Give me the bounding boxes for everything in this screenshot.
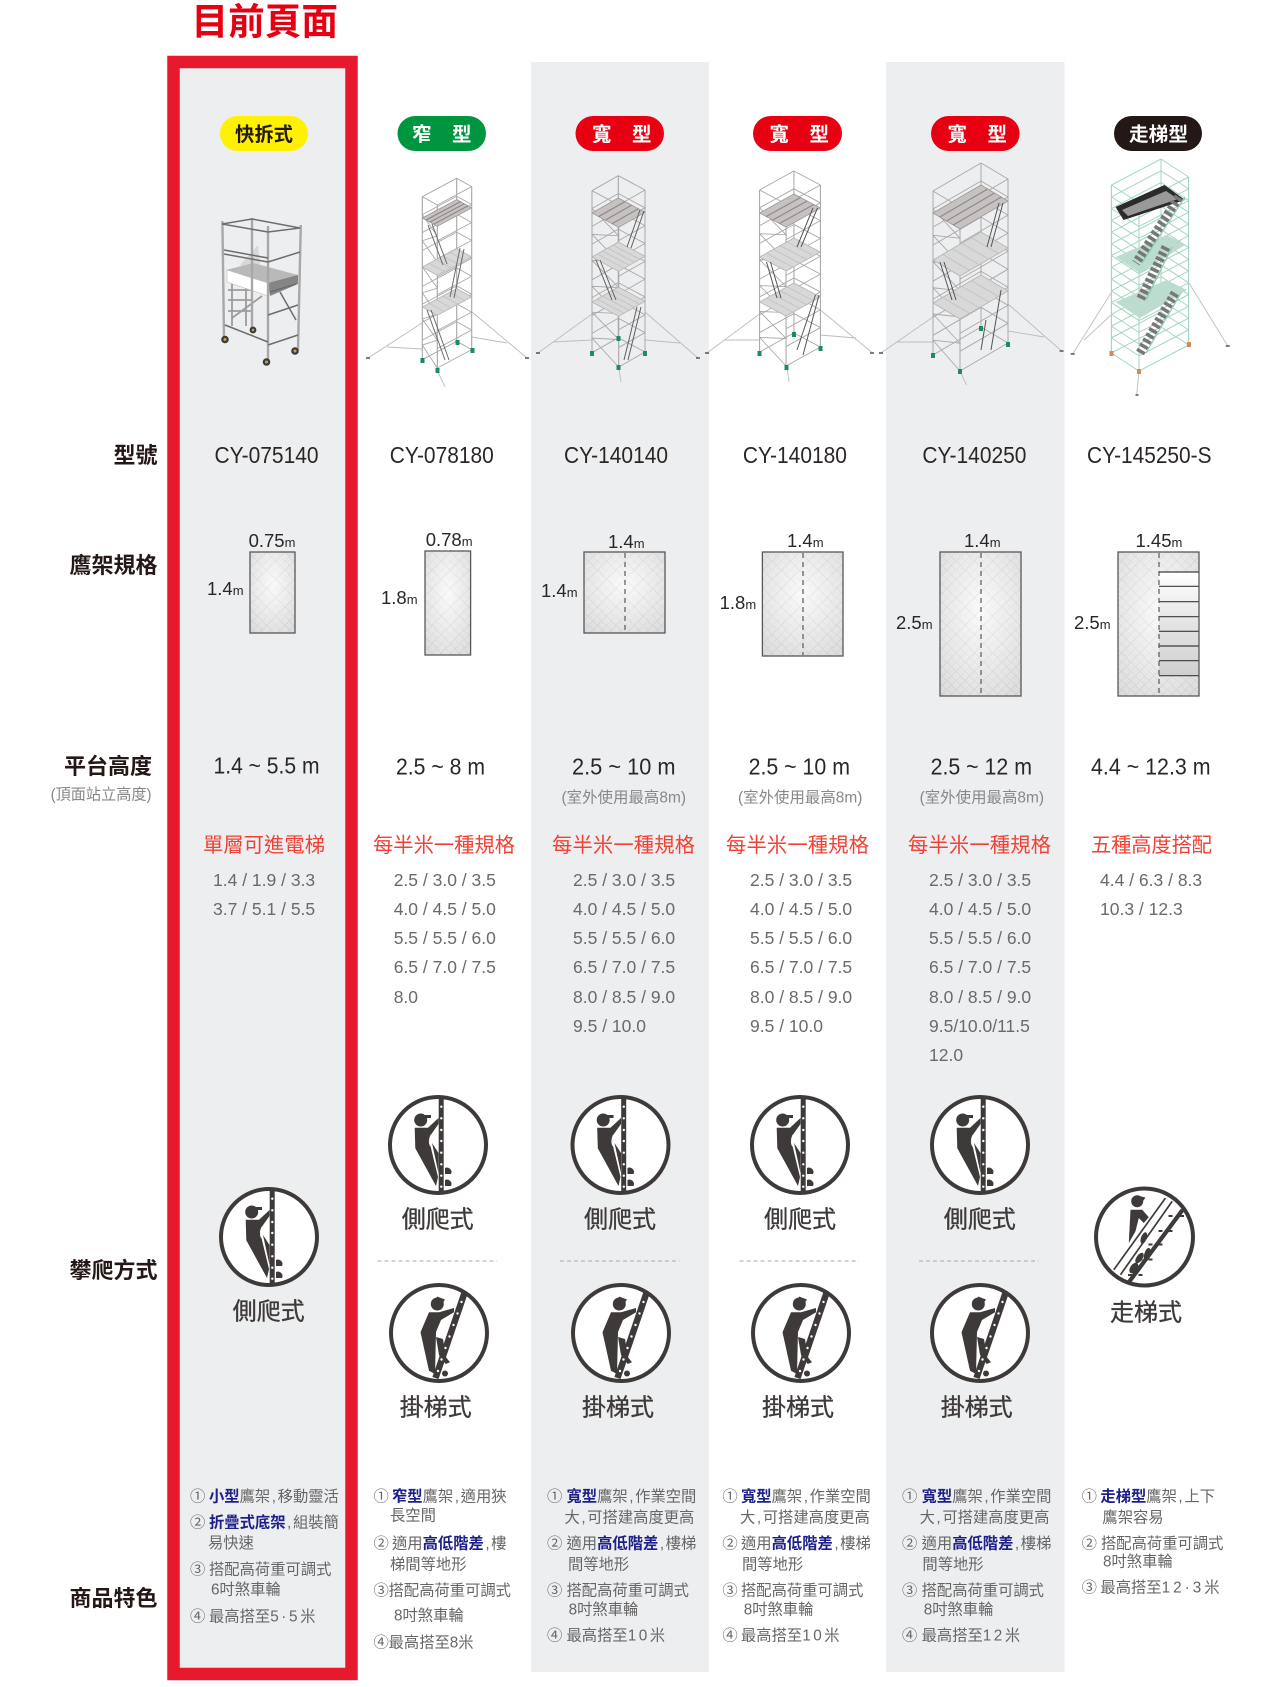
features list: ② — [722, 1535, 738, 1552]
height options list: 5.5 / 5.5 / 6.0 — [929, 928, 1031, 948]
panel: column CY-140180 — [705, 116, 874, 1644]
climb label: 掛梯式 — [941, 1395, 1013, 1422]
features list: 間等地形 — [568, 1555, 629, 1573]
climb label: 側爬式 — [764, 1207, 836, 1234]
title: current page marker: 目前頁面 — [192, 2, 338, 42]
panel: row labels — [51, 443, 158, 1611]
height options list: 4.4 / 6.3 / 8.3 — [1100, 870, 1202, 890]
label: product features: 商品特色 — [69, 1586, 158, 1611]
features list: 易快速 — [208, 1535, 254, 1552]
features list: ③ — [190, 1561, 205, 1578]
height options list: 5.5 / 5.5 / 6.0 — [394, 928, 496, 948]
platform height: 2.5 ~ 12 m — [931, 754, 1032, 780]
platform plan diagram: 2.5m — [896, 612, 933, 633]
height options list: 6.5 / 7.0 / 7.5 — [750, 957, 852, 977]
badge: wide type: 寬型 — [948, 123, 1007, 146]
features list: ① — [547, 1488, 562, 1505]
illustration: wide scaffold tower — [705, 171, 874, 382]
climb label: 掛梯式 — [400, 1395, 472, 1422]
illustration: narrow scaffold tower — [366, 178, 529, 387]
platform plan diagram: 1.4m — [207, 578, 244, 599]
features list: 寬型鷹架,作業空間 — [741, 1487, 871, 1505]
features list: ② — [547, 1535, 562, 1552]
illustration: wide tall scaffold tower — [879, 163, 1064, 385]
illustration: folding scaffold — [221, 218, 301, 366]
features list: 大,可搭建高度更高 — [564, 1509, 694, 1526]
features list: 適用高低階差,樓梯 — [566, 1534, 696, 1552]
features list: 寬型鷹架,作業空間 — [922, 1487, 1051, 1505]
height options list: 6.5 / 7.0 / 7.5 — [394, 957, 496, 977]
badge: stair type — [1114, 116, 1202, 151]
badge: wide type: 寬型 — [770, 123, 829, 146]
features list — [374, 1487, 511, 1651]
platform plan diagram: 0.75m — [249, 530, 295, 551]
features list: ③ — [374, 1582, 389, 1599]
platform plan diagram with stair — [1074, 530, 1199, 696]
height options heading: 五種高度搭配 — [1091, 834, 1212, 857]
features list: 8吋煞車輪 — [394, 1607, 464, 1624]
outdoor height note: (室外使用最高8m) — [738, 788, 862, 806]
label: platform spec: 鷹架規格 — [69, 553, 158, 578]
climb label: 掛梯式 — [762, 1395, 834, 1422]
badge: wide type: 寬型 — [592, 123, 652, 146]
height options list: 2.5 / 3.0 / 3.5 — [573, 870, 675, 890]
panel: column CY-075140 (current page) — [174, 62, 352, 1674]
platform plan diagram — [381, 529, 473, 655]
features list: ③ — [722, 1582, 738, 1599]
features list: ① — [1082, 1488, 1097, 1505]
platform height: 1.4 ~ 5.5 m — [214, 752, 320, 778]
features list: 搭配高荷重可調式 — [1101, 1535, 1223, 1552]
icon: ladder climb — [573, 1285, 669, 1381]
platform height: 2.5 ~ 10 m — [572, 754, 676, 780]
height options list: 9.5 / 10.0 — [750, 1016, 823, 1036]
height options list: 8.0 / 8.5 / 9.0 — [573, 987, 675, 1007]
icon: side climb — [390, 1096, 486, 1194]
model number: CY-140250 — [922, 442, 1026, 468]
height options list — [573, 870, 675, 1036]
features list: ① — [374, 1488, 389, 1505]
features list: 長空間 — [390, 1507, 436, 1524]
height options heading: 單層可進電梯 — [203, 834, 325, 857]
features list — [547, 1487, 696, 1644]
badge: narrow type — [398, 116, 486, 151]
platform plan diagram: 1.8m — [720, 592, 756, 613]
height options list: 4.0 / 4.5 / 5.0 — [929, 899, 1031, 919]
features list — [902, 1487, 1051, 1644]
panel: column CY-140140 — [531, 62, 709, 1672]
height options list: 2.5 / 3.0 / 3.5 — [394, 870, 496, 890]
model number: CY-140140 — [564, 442, 668, 468]
features list: ② — [190, 1514, 205, 1531]
features list: 折疊式底架,組裝簡 — [209, 1513, 339, 1531]
features list: 最高搭至10米 — [741, 1627, 840, 1644]
height options list: 9.5 / 10.0 — [573, 1016, 646, 1036]
platform plan diagram: 1.4m — [541, 580, 578, 601]
climb label: 側爬式 — [944, 1207, 1016, 1234]
features list: 8吋煞車輪 — [1103, 1553, 1173, 1570]
features list: 搭配高荷重可調式 — [922, 1582, 1044, 1599]
label: standing height note: (頂面站立高度) — [51, 786, 152, 804]
features list: 適用高低階差,樓梯 — [922, 1534, 1051, 1552]
features list: 間等地形 — [922, 1555, 984, 1573]
height options list: 6.5 / 7.0 / 7.5 — [929, 957, 1031, 977]
platform plan diagram: 1.4m — [787, 530, 824, 551]
features list: ① — [902, 1488, 917, 1505]
height options list: 8.0 / 8.5 / 9.0 — [929, 987, 1031, 1007]
model number: CY-075140 — [214, 442, 318, 468]
features list: ③ — [547, 1582, 562, 1599]
features list: ④ — [190, 1608, 205, 1625]
features list: 梯間等地形 — [390, 1555, 466, 1573]
features list: ② — [1082, 1535, 1097, 1552]
features list: 搭配高荷重可調式 — [209, 1561, 331, 1578]
badge: narrow type: 窄型 — [412, 123, 472, 146]
badge: wide type — [753, 116, 842, 151]
icon: ladder climb — [753, 1285, 849, 1381]
features list: 最高搭至10米 — [566, 1627, 665, 1644]
features list: 大,可搭建高度更高 — [740, 1509, 870, 1526]
model number: CY-145250-S — [1087, 442, 1212, 468]
features list: ④ — [547, 1627, 562, 1644]
features list: 8吋煞車輪 — [924, 1601, 993, 1618]
icon: side climb — [221, 1188, 317, 1286]
features list: 最高搭至12·3米 — [1100, 1579, 1220, 1596]
features list: 窄型鷹架,適用狹 — [392, 1487, 507, 1505]
height options heading: 每半米一種規格 — [908, 834, 1051, 857]
features list: 最高搭至8米 — [389, 1634, 474, 1651]
platform height: 2.5 ~ 10 m — [749, 754, 850, 780]
panel: column CY-078180 — [366, 116, 529, 1651]
features list: 搭配高荷重可調式 — [741, 1582, 863, 1599]
features list: ④ — [374, 1634, 389, 1651]
features list: 8吋煞車輪 — [744, 1601, 813, 1618]
features list: 大,可搭建高度更高 — [920, 1509, 1049, 1526]
label: platform height: 平台高度 — [64, 754, 152, 779]
climb label: 側爬式 — [233, 1299, 305, 1326]
features list: 小型鷹架,移動靈活 — [209, 1488, 339, 1505]
height options list — [750, 870, 852, 1036]
climb label: 側爬式 — [402, 1207, 474, 1234]
platform plan diagram: 1.4m — [608, 531, 645, 552]
platform plan diagram — [207, 530, 295, 633]
red current-page frame — [174, 62, 352, 1674]
features list: 間等地形 — [742, 1555, 803, 1573]
platform plan diagram: 1.4m — [964, 530, 1001, 551]
features list: 6吋煞車輪 — [211, 1581, 281, 1598]
height options heading: 每半米一種規格 — [552, 834, 695, 857]
height options list: 3.7 / 5.1 / 5.5 — [213, 899, 315, 919]
badge: quick release type: 快拆式 — [235, 124, 293, 146]
features list: 走梯型鷹架,上下 — [1100, 1487, 1215, 1505]
height options list: 2.5 / 3.0 / 3.5 — [750, 870, 852, 890]
height options list — [929, 870, 1031, 1065]
badge: wide type — [931, 116, 1020, 151]
features list — [1082, 1487, 1223, 1596]
climb label: 掛梯式 — [582, 1395, 654, 1422]
features list: 適用高低階差,樓 — [392, 1534, 507, 1552]
features list: ③ — [902, 1582, 917, 1599]
platform plan diagram: 0.78m — [426, 529, 473, 550]
features list: 8吋煞車輪 — [569, 1601, 638, 1618]
icon: stair climb — [1096, 1188, 1193, 1286]
badge: quick release type — [220, 116, 308, 151]
features list — [190, 1488, 339, 1625]
height options list: 10.3 / 12.3 — [1100, 899, 1183, 919]
height options list — [394, 870, 496, 1007]
icon: side climb — [752, 1096, 848, 1194]
features list: 鷹架容易 — [1102, 1509, 1164, 1526]
height options list: 5.5 / 5.5 / 6.0 — [573, 928, 675, 948]
height options list: 5.5 / 5.5 / 6.0 — [750, 928, 852, 948]
platform plan diagram — [720, 530, 843, 656]
features list: ② — [374, 1535, 389, 1552]
label: climbing method: 攀爬方式 — [69, 1258, 158, 1283]
icon: side climb — [572, 1096, 668, 1194]
label: model: 型號 — [113, 443, 158, 468]
outdoor height note: (室外使用最高8m) — [562, 788, 686, 806]
badge: stair type: 走梯型 — [1129, 124, 1188, 146]
height options list: 2.5 / 3.0 / 3.5 — [929, 870, 1031, 890]
platform plan diagram with stair: 2.5m — [1074, 612, 1111, 633]
features list: ④ — [722, 1627, 738, 1644]
panel: column CY-145250-S — [1071, 116, 1230, 1596]
panel: column CY-140250 — [879, 62, 1064, 1672]
badge: wide type — [576, 116, 664, 151]
height options list: 12.0 — [929, 1045, 963, 1065]
platform height: 2.5 ~ 8 m — [396, 754, 485, 780]
height options list: 4.0 / 4.5 / 5.0 — [573, 899, 675, 919]
features list: ① — [722, 1488, 738, 1505]
features list: ④ — [902, 1627, 917, 1644]
illustration: wide scaffold tower — [536, 176, 700, 382]
features list: 搭配高荷重可調式 — [566, 1582, 689, 1599]
model number: CY-078180 — [390, 442, 494, 468]
platform plan diagram with stair: 1.45m — [1136, 530, 1182, 551]
outdoor height note: (室外使用最高8m) — [920, 788, 1044, 806]
icon: ladder climb — [391, 1285, 487, 1381]
features list: 最高搭至5·5米 — [209, 1608, 315, 1625]
height options list: 8.0 / 8.5 / 9.0 — [750, 987, 852, 1007]
features list: ② — [902, 1535, 917, 1552]
illustration: stair scaffold tower — [1071, 159, 1230, 395]
platform plan diagram — [541, 531, 665, 633]
features list: ① — [190, 1488, 205, 1505]
features list: ③ — [1082, 1579, 1097, 1596]
height options list: 4.0 / 4.5 / 5.0 — [394, 899, 496, 919]
height options list: 6.5 / 7.0 / 7.5 — [573, 957, 675, 977]
platform height: 4.4 ~ 12.3 m — [1091, 754, 1211, 780]
features list: 適用高低階差,樓梯 — [741, 1534, 871, 1552]
icon: ladder climb — [932, 1285, 1028, 1381]
climb label: 側爬式 — [584, 1207, 656, 1234]
height options list: 4.0 / 4.5 / 5.0 — [750, 899, 852, 919]
height options list: 8.0 — [394, 987, 418, 1007]
height options heading: 每半米一種規格 — [726, 834, 869, 857]
height options list: 9.5/10.0/11.5 — [929, 1016, 1030, 1036]
height options list: 1.4 / 1.9 / 3.3 — [213, 870, 315, 890]
features list: 搭配高荷重可調式 — [389, 1582, 511, 1599]
height options heading: 每半米一種規格 — [373, 834, 515, 857]
icon: side climb — [932, 1096, 1028, 1194]
climb label: 走梯式 — [1110, 1300, 1182, 1327]
height options list — [213, 870, 315, 919]
features list — [722, 1487, 871, 1644]
features list: 寬型鷹架,作業空間 — [566, 1487, 696, 1505]
model number: CY-140180 — [743, 442, 847, 468]
height options list — [1100, 870, 1202, 919]
platform plan diagram: 1.8m — [381, 587, 418, 608]
platform plan diagram — [896, 530, 1021, 696]
features list: 最高搭至12米 — [922, 1627, 1020, 1644]
